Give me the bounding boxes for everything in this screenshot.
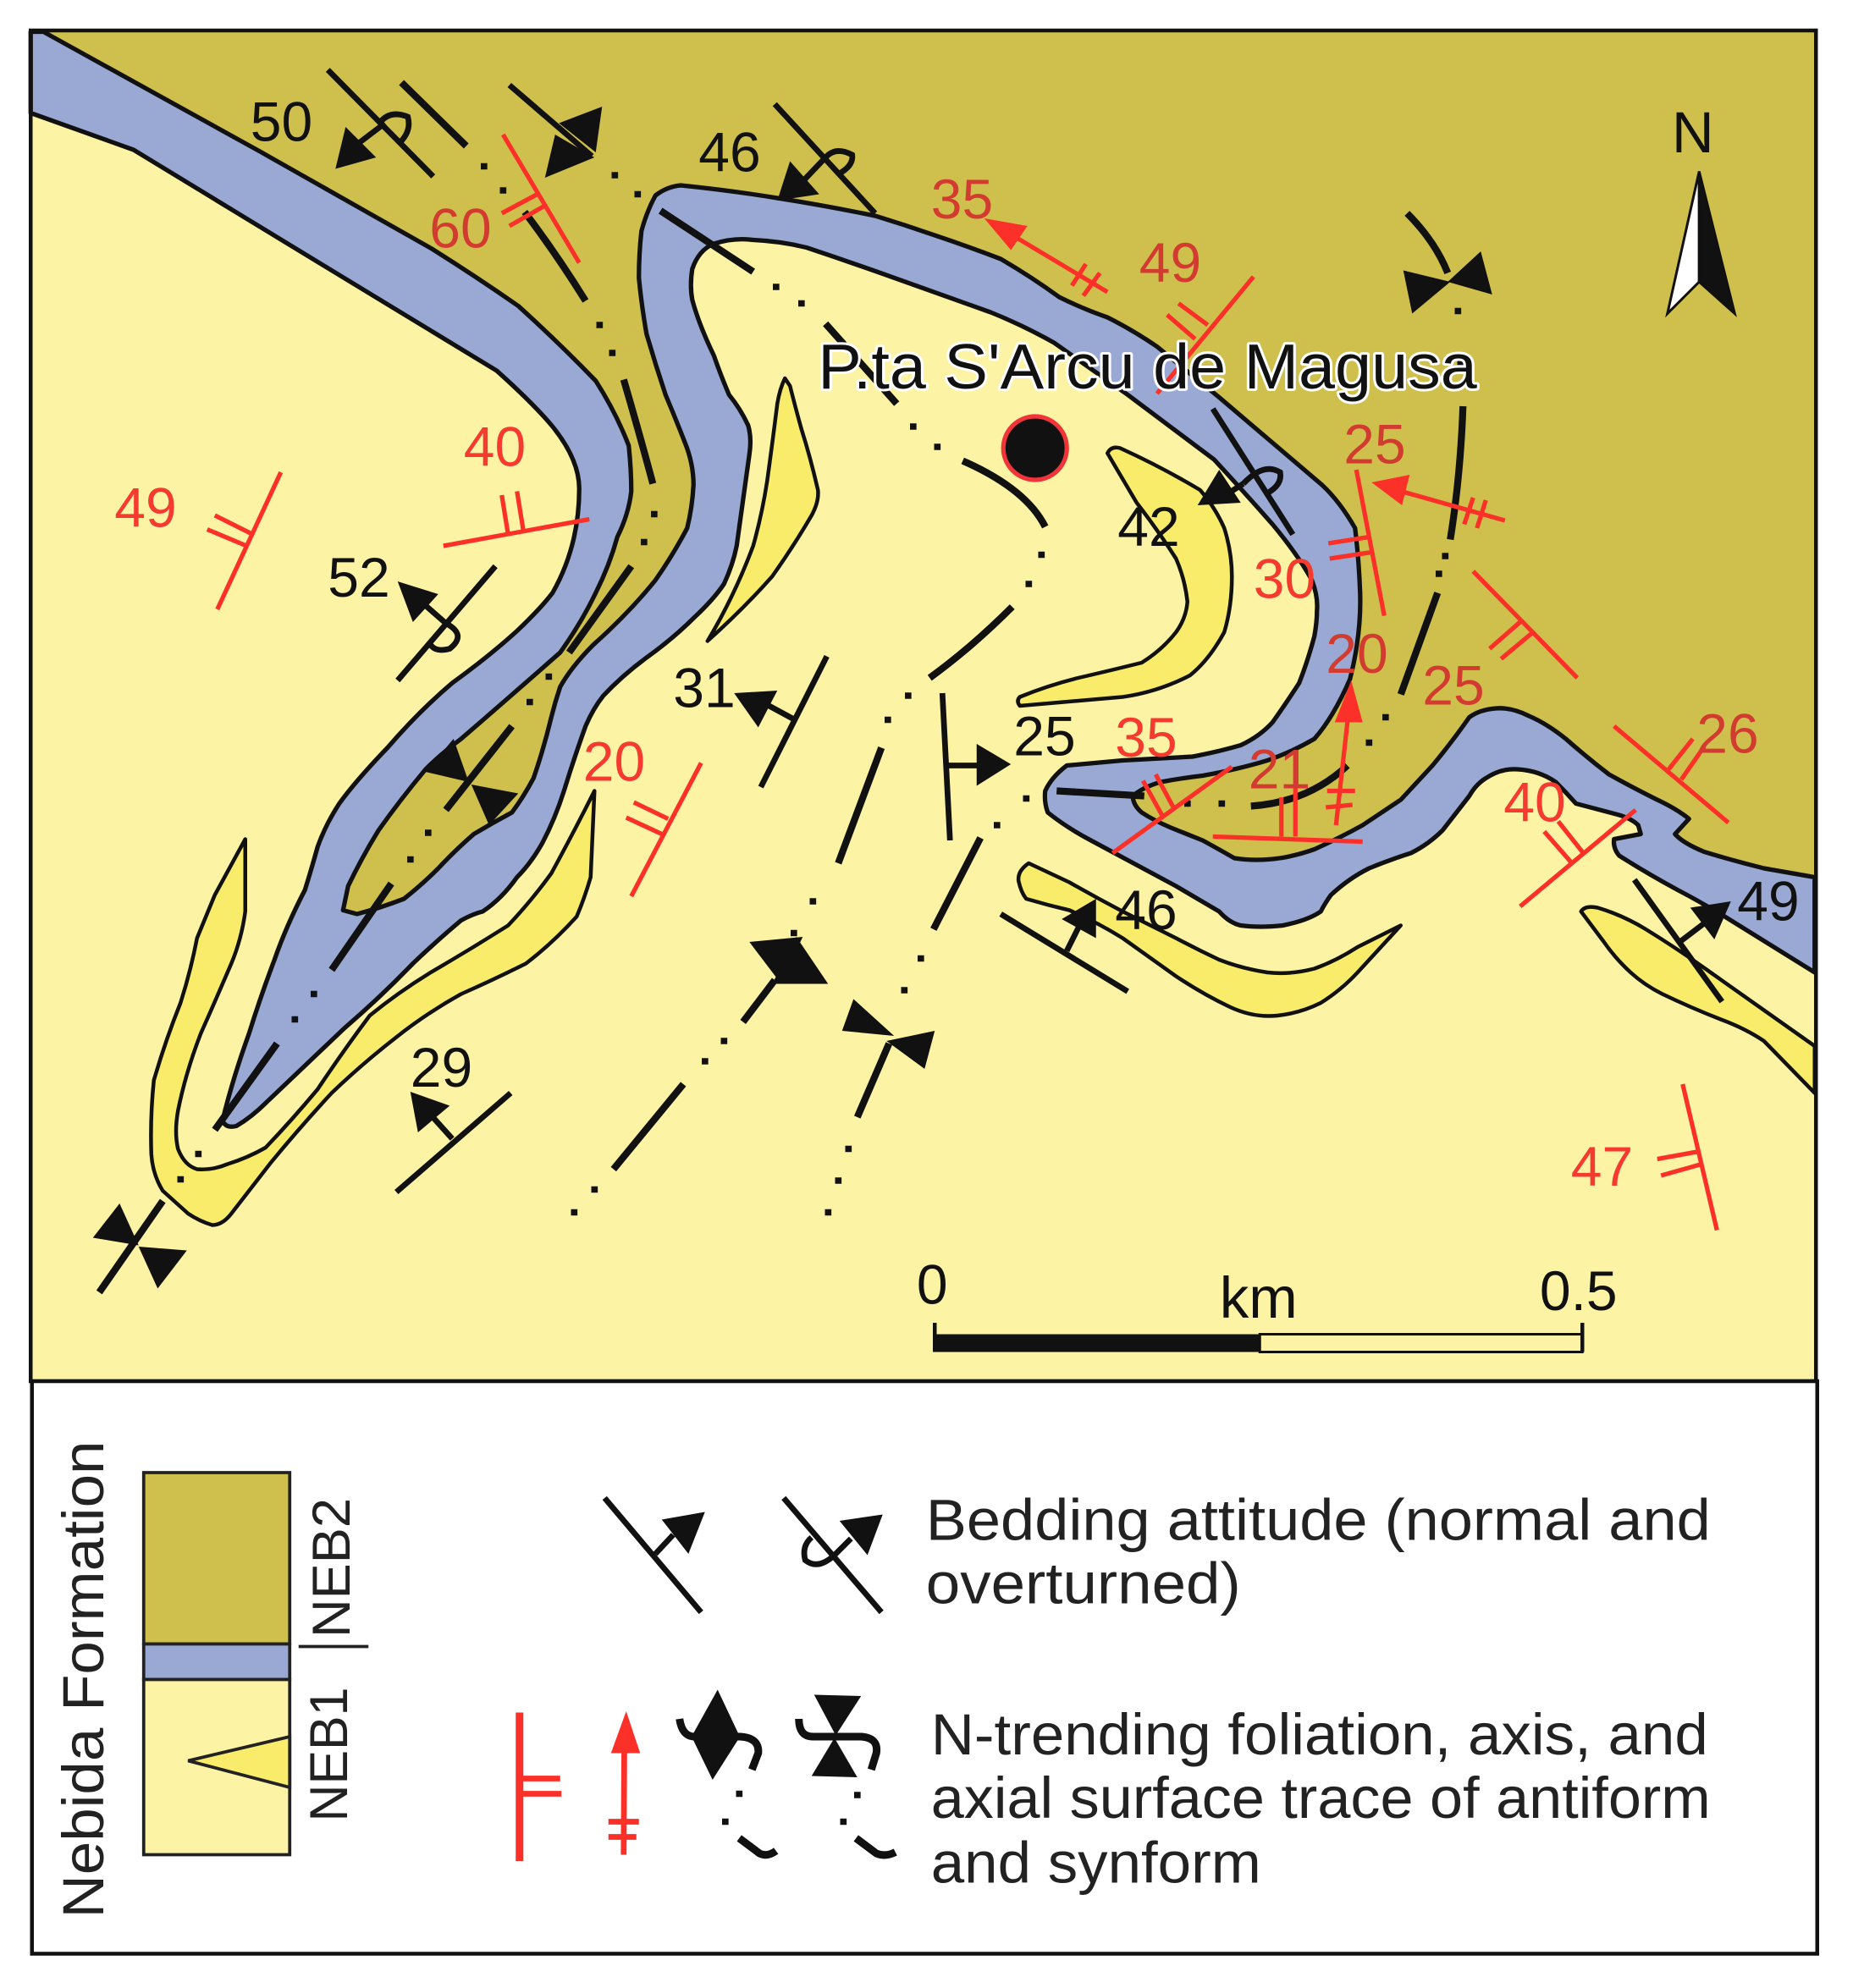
scale bar: [917, 1253, 1618, 1352]
unit label NEB1: NEB1: [300, 1688, 359, 1821]
legend symbol: red axis: [609, 1711, 640, 1855]
axis 20 arrow: 20: [1326, 622, 1388, 685]
foliation 60: 60: [429, 196, 492, 260]
foliation 49 left: [114, 472, 281, 609]
foliation 40 right: 40: [1503, 770, 1566, 834]
bedding symbol 42: 42: [1117, 495, 1180, 558]
foliation 49 top: 49: [1139, 231, 1201, 294]
foliation 25 right: 25: [1422, 653, 1485, 717]
legend text: bedding: Bedding attitude (normal and: [926, 1488, 1711, 1553]
bedding symbol 50: 50: [251, 90, 312, 153]
NEB1 background unit: [30, 30, 1816, 1381]
foliation 26: [1614, 702, 1759, 823]
foliation 30: [1254, 470, 1384, 616]
foliation 40 right: [1503, 770, 1635, 906]
scale bar: 0: [917, 1253, 948, 1316]
bedding symbol 50: [251, 69, 433, 176]
bedding symbol 31: [673, 657, 827, 787]
foliation 40: 40: [464, 415, 526, 478]
bedding symbol 31: 31: [673, 657, 736, 719]
foliation 47: [1571, 1084, 1717, 1231]
legend symbol: synform: [799, 1694, 896, 1855]
blue marker unit band: [30, 32, 1815, 1126]
synform symbol top right: [1404, 251, 1492, 313]
bedding symbol 46 top: 46: [698, 120, 761, 184]
locality dot: [1003, 416, 1067, 480]
bedding symbol 52: [328, 546, 495, 680]
antiform symbol top: [510, 85, 602, 178]
bedding symbol 49 right: 49: [1737, 870, 1800, 933]
axis 20 arrow: [1326, 622, 1388, 825]
antiform symbol centre: [749, 937, 828, 983]
foliation 21: [1213, 738, 1363, 841]
foliation 47: 47: [1571, 1135, 1633, 1198]
panel: geological map: [30, 30, 1816, 1381]
axis 25 arrow: 25: [1343, 413, 1406, 476]
bedding symbol 52: 52: [328, 546, 390, 609]
foliation 21: 21: [1249, 738, 1310, 801]
legend symbol: normal bedding: [604, 1498, 705, 1612]
foliation 40: [444, 415, 589, 546]
legend symbol: antiform: [680, 1689, 776, 1855]
axial surface traces: [99, 83, 1463, 1292]
icon: north arrow: N: [1672, 100, 1714, 165]
foliation 20 centre: [583, 730, 701, 896]
bedding symbol 29: 29: [411, 1036, 472, 1099]
foliation 35 centre: 35: [1115, 706, 1177, 768]
foliation 30: 30: [1254, 547, 1315, 610]
bedding symbol 46 lower: 46: [1115, 878, 1177, 941]
legend text: bedding: overturned): [926, 1551, 1241, 1616]
synform symbol lens: [426, 739, 518, 825]
axis 35 arrow: 35: [931, 168, 993, 230]
NEB2 olive unit: [30, 30, 1815, 1104]
foliation 25 right: [1422, 571, 1577, 716]
foliation 60: [429, 135, 579, 262]
legend text: foliation: and synform: [931, 1831, 1261, 1896]
NEB1 lens A: [708, 378, 818, 642]
stratigraphic column: [144, 1473, 290, 1855]
bedding symbol 49 right: [1635, 870, 1800, 1002]
scale bar: 0.5: [1540, 1259, 1618, 1322]
foliation 49 left: 49: [114, 476, 177, 539]
synform symbol bottom left: [93, 1203, 187, 1288]
legend text: foliation: axial surface trace of antiform: [931, 1765, 1711, 1831]
bedding symbol 29: [396, 1036, 510, 1192]
formation label: Nebida Formation: [51, 1440, 116, 1918]
panel: legend: [32, 1381, 1817, 1953]
bedding symbol 25 black: 25: [1013, 704, 1076, 768]
foliation 26: 26: [1696, 702, 1759, 765]
unit divider: [299, 1645, 368, 1648]
unit label NEB2: NEB2: [302, 1498, 361, 1638]
scale bar: km: [1220, 1265, 1298, 1330]
NEB1 lens C: [1018, 863, 1401, 1016]
bedding symbol 42: [1117, 409, 1293, 558]
bedding symbol 46 lower: [1001, 878, 1177, 992]
bedding symbol 46 top: [698, 104, 875, 213]
legend symbol: red foliation: [520, 1713, 561, 1861]
axis 35 arrow: [931, 168, 1107, 296]
legend text: foliation: N-trending foliation, axis, and: [931, 1702, 1708, 1767]
icon: north arrow: [1668, 100, 1734, 314]
legend symbol: overturned bedding: [784, 1498, 883, 1612]
foliation 49 top: [1139, 231, 1254, 394]
foliation 20 centre: 20: [583, 730, 645, 793]
NEB1 lens B: [1017, 448, 1232, 706]
foliation 35 centre: [1112, 706, 1232, 853]
axis 25 arrow: [1343, 413, 1505, 528]
NEB1 lens E: [151, 790, 594, 1225]
locality label: P.ta S'Arcu de Magusa: [818, 331, 1477, 402]
bedding symbol 25 black: [942, 693, 1076, 840]
NEB1 lens D: [1581, 907, 1815, 1093]
synform symbol centre: [842, 999, 935, 1069]
